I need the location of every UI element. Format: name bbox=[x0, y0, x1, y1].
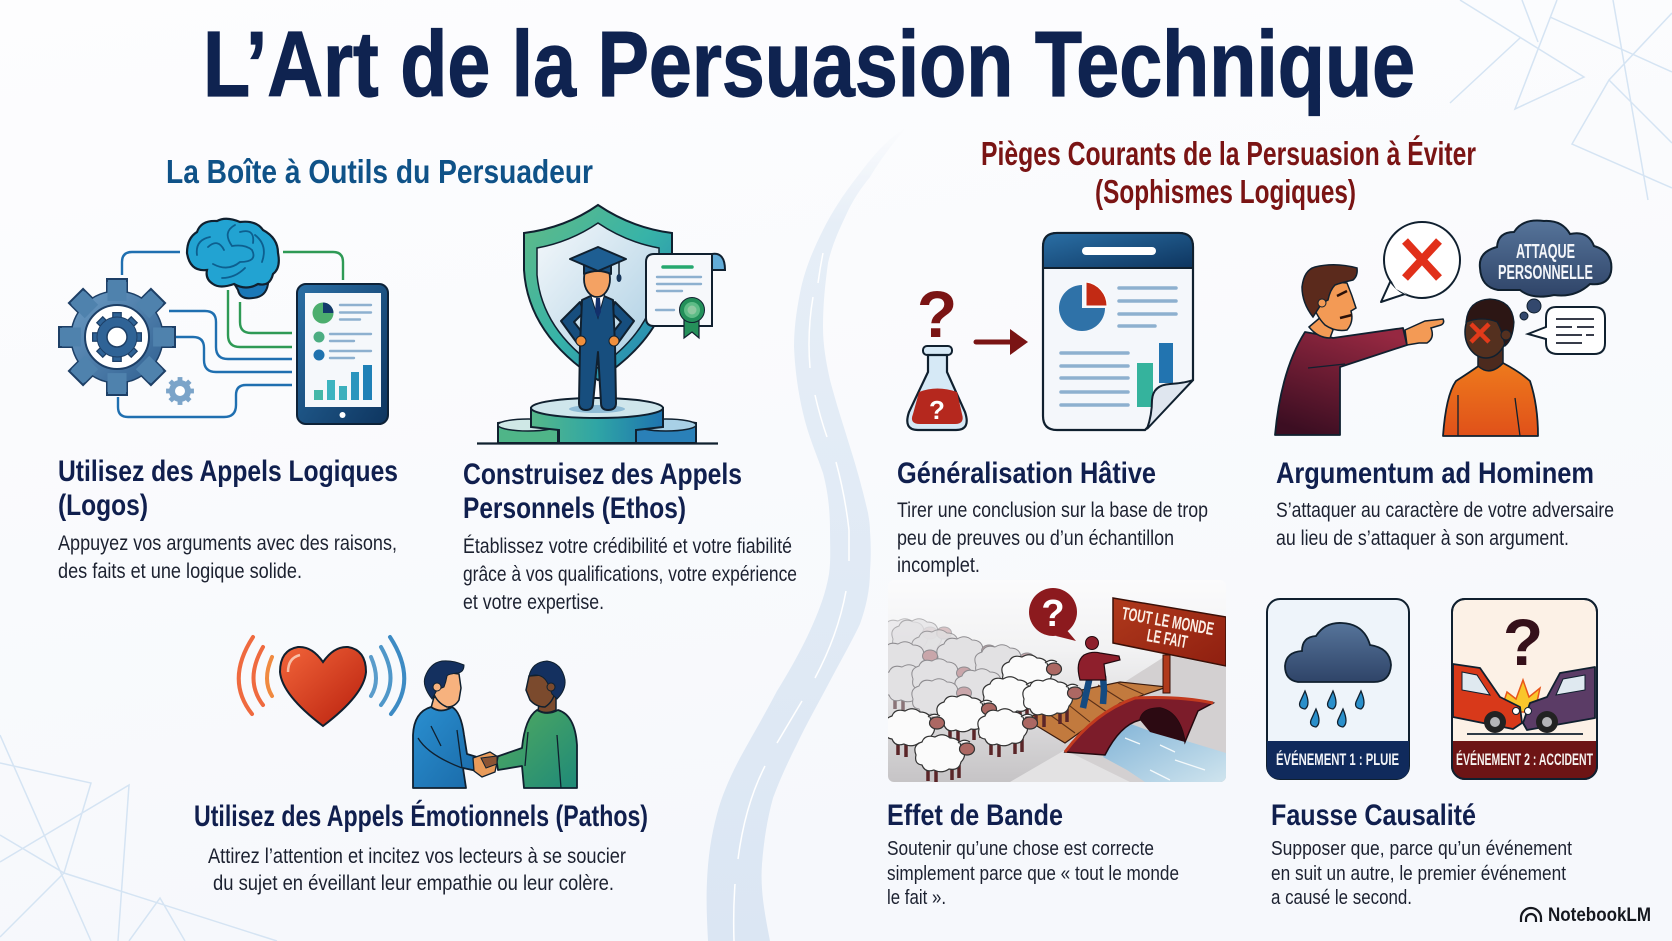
heading: pitfalls: Pièges Courants de la Persuasion à Éviter bbox=[981, 135, 1476, 172]
text: ethos: et votre expertise. bbox=[463, 591, 604, 614]
icon: event 1 rain card: ÉVÉNEMENT 1 : PLUIE bbox=[1276, 750, 1399, 769]
text: false causality: a causé le second. bbox=[1271, 887, 1412, 909]
icon: event 1 rain card bbox=[1267, 599, 1409, 779]
text: logos: (Logos) bbox=[58, 489, 148, 522]
icon: hasty generalisation flask and report: ? bbox=[917, 277, 957, 351]
icon: ethos shield graduate certificate bbox=[477, 205, 725, 444]
text: hasty generalisation: Tirer une conclusion sur la base de trop bbox=[897, 499, 1208, 522]
text: ethos: Construisez des Appels bbox=[463, 458, 742, 491]
text: logos: Utilisez des Appels Logiques bbox=[58, 455, 398, 488]
text: pathos bbox=[194, 799, 648, 895]
text: ad hominem: au lieu de s’attaquer à son argument. bbox=[1276, 527, 1569, 550]
icon: hasty generalisation flask and report: ? bbox=[929, 395, 945, 425]
text: pathos: Attirez l’attention et incitez vos lecteurs à se soucier bbox=[208, 845, 626, 868]
panel: toolbox of the persuader bbox=[58, 153, 797, 895]
text: pathos: du sujet en éveillant leur empathie ou leur colère. bbox=[213, 872, 614, 895]
text: ethos bbox=[463, 458, 797, 614]
icon: bandwagon sheep bridge scene bbox=[878, 580, 1226, 783]
text: false causality bbox=[1271, 799, 1572, 909]
text: ethos: grâce à vos qualifications, votre expérience bbox=[463, 563, 797, 586]
text: false causality: en suit un autre, le premier événement bbox=[1271, 863, 1566, 885]
icon: logos gear brain tablet bbox=[59, 219, 388, 424]
text: bandwagon: le fait ». bbox=[887, 887, 946, 909]
heading: pitfalls bbox=[981, 135, 1476, 210]
text: hasty generalisation: Généralisation Hâtive bbox=[897, 457, 1156, 490]
title: L’Art de la Persuasion Technique bbox=[203, 12, 1415, 116]
text: bandwagon: Effet de Bande bbox=[887, 799, 1063, 832]
icon: event 2 accident card: ÉVÉNEMENT 2 : ACCIDENT bbox=[1456, 750, 1593, 769]
winding road divider bbox=[707, 127, 907, 941]
text: ad hominem: S’attaquer au caractère de votre adversaire bbox=[1276, 499, 1614, 522]
heading: toolbox: La Boîte à Outils du Persuadeur bbox=[166, 153, 593, 190]
icon: event 2 accident card bbox=[1452, 599, 1597, 779]
text: ad hominem bbox=[1276, 457, 1614, 550]
panel: common pitfalls bbox=[878, 135, 1614, 909]
icon: bandwagon sheep bridge scene: ? bbox=[1041, 593, 1065, 635]
text: bandwagon: simplement parce que « tout le monde bbox=[887, 863, 1179, 885]
icon: bandwagon sheep bridge scene: LE FAIT bbox=[1145, 625, 1189, 652]
text: false causality: Fausse Causalité bbox=[1271, 799, 1476, 832]
text: bandwagon bbox=[887, 799, 1179, 909]
text: bandwagon: Soutenir qu’une chose est correcte bbox=[887, 838, 1154, 860]
icon: bandwagon sheep bridge scene: TOUT LE MONDE bbox=[1120, 603, 1215, 639]
text: hasty generalisation: incomplet. bbox=[897, 554, 980, 577]
text: logos: Appuyez vos arguments avec des raisons, bbox=[58, 532, 397, 555]
text: ad hominem: Argumentum ad Hominem bbox=[1276, 457, 1594, 490]
text: pathos: Utilisez des Appels Émotionnels (Pathos) bbox=[194, 799, 648, 833]
heading: pitfalls: (Sophismes Logiques) bbox=[1095, 173, 1356, 210]
NotebookLM logo: NotebookLM bbox=[1548, 905, 1651, 926]
text: hasty generalisation: peu de preuves ou d’un échantillon bbox=[897, 527, 1174, 550]
text: ethos: Établissez votre crédibilité et votre fiabilité bbox=[463, 535, 792, 558]
icon: pathos heart and handshake bbox=[239, 637, 577, 788]
text: ethos: Personnels (Ethos) bbox=[463, 492, 686, 525]
icon: event 2 accident card: ? bbox=[1503, 605, 1543, 679]
icon: ad hominem argument scene bbox=[1275, 220, 1611, 436]
text: logos: des faits et une logique solide. bbox=[58, 560, 302, 583]
icon: hasty generalisation flask and report bbox=[907, 233, 1193, 430]
text: hasty generalisation bbox=[897, 457, 1208, 577]
icon: ad hominem argument scene: ATTAQUE bbox=[1516, 241, 1575, 263]
text: logos bbox=[58, 455, 398, 583]
icon: ad hominem argument scene: PERSONNELLE bbox=[1498, 262, 1593, 284]
text: false causality: Supposer que, parce qu’un événement bbox=[1271, 838, 1572, 860]
